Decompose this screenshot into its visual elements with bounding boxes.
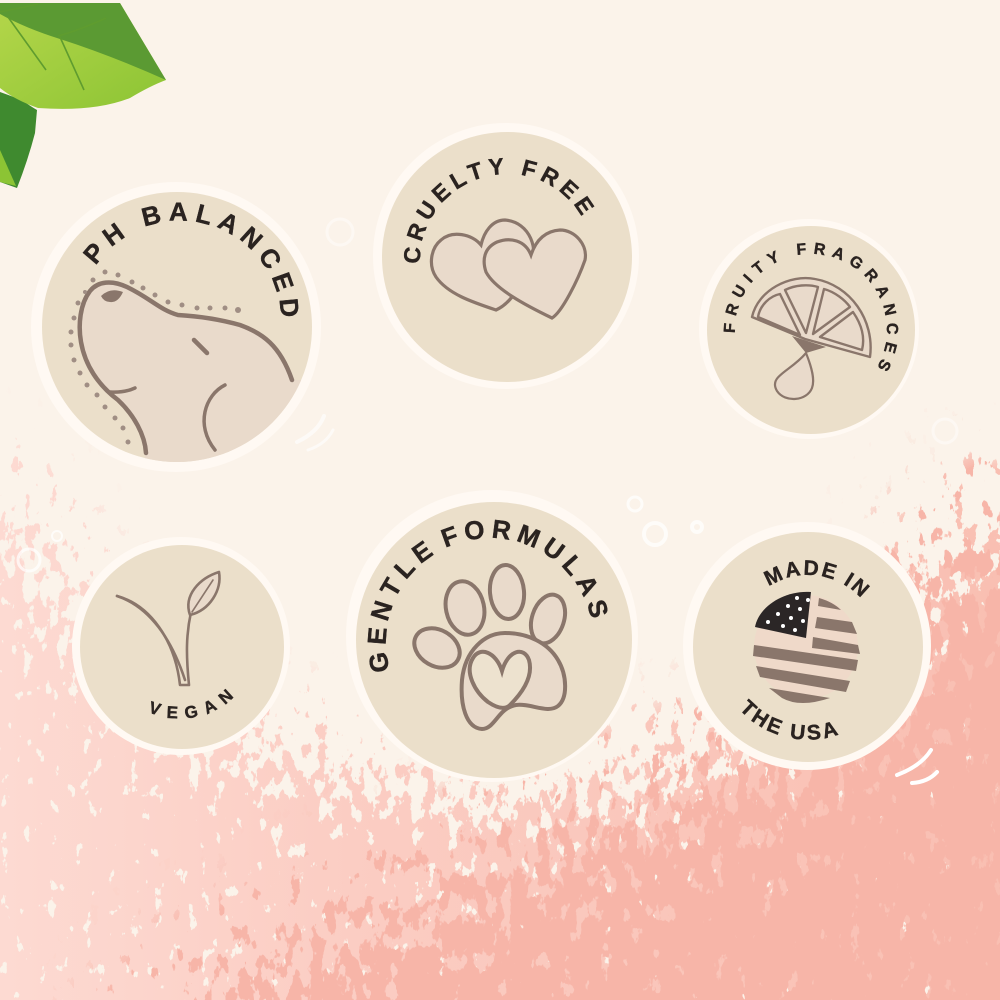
background: light pink paint splatter	[0, 438, 1000, 1000]
icon: sprout V	[117, 572, 219, 685]
badge ring	[31, 182, 321, 472]
icon: paw print with heart	[407, 564, 571, 729]
badge: cruelty free	[373, 123, 639, 389]
label: GENTLE FORMULAS: GENTLE FORMULAS	[368, 520, 608, 672]
badge ring	[72, 537, 290, 755]
label: MADE IN: MADE IN	[763, 560, 870, 598]
badge ring	[699, 219, 919, 439]
label: FRUITY FRAGRANCES: FRUITY FRAGRANCES	[724, 242, 898, 371]
badge ring	[346, 490, 638, 782]
flag canton	[755, 592, 811, 638]
badge ring	[373, 123, 639, 389]
badge disc	[42, 192, 312, 462]
badge disc	[707, 226, 915, 434]
badge: made in the USA	[683, 522, 931, 770]
badge disc	[80, 545, 284, 749]
background: deeper pink paint splatter	[56, 430, 1000, 1000]
icon: two hearts	[431, 220, 585, 318]
badge: fruity fragrances	[699, 219, 919, 439]
badge disc	[382, 132, 632, 382]
badge: gentle formulas	[346, 490, 638, 782]
icon: dog head in profile	[80, 282, 320, 470]
label: THE USA: THE USA	[742, 698, 839, 740]
label: VEGAN: VEGAN	[151, 688, 234, 719]
badge ring	[683, 522, 931, 770]
flag stripes	[753, 598, 860, 703]
icon: dotted scent trail	[68, 270, 241, 444]
label: CRUELTY FREE: CRUELTY FREE	[404, 158, 594, 263]
bubbles and swooshes	[18, 219, 957, 783]
badge disc	[693, 532, 923, 762]
icon: juice drop	[775, 353, 813, 399]
badge disc	[356, 502, 632, 778]
icon: green leaves	[0, 3, 166, 188]
label: PH BALANCED: PH BALANCED	[82, 202, 298, 316]
flag background	[754, 595, 858, 699]
badge: vegan	[72, 537, 290, 755]
icon: citrus slice	[752, 278, 871, 357]
icon: round US flag	[753, 592, 860, 703]
badge: pH balanced	[31, 182, 321, 472]
